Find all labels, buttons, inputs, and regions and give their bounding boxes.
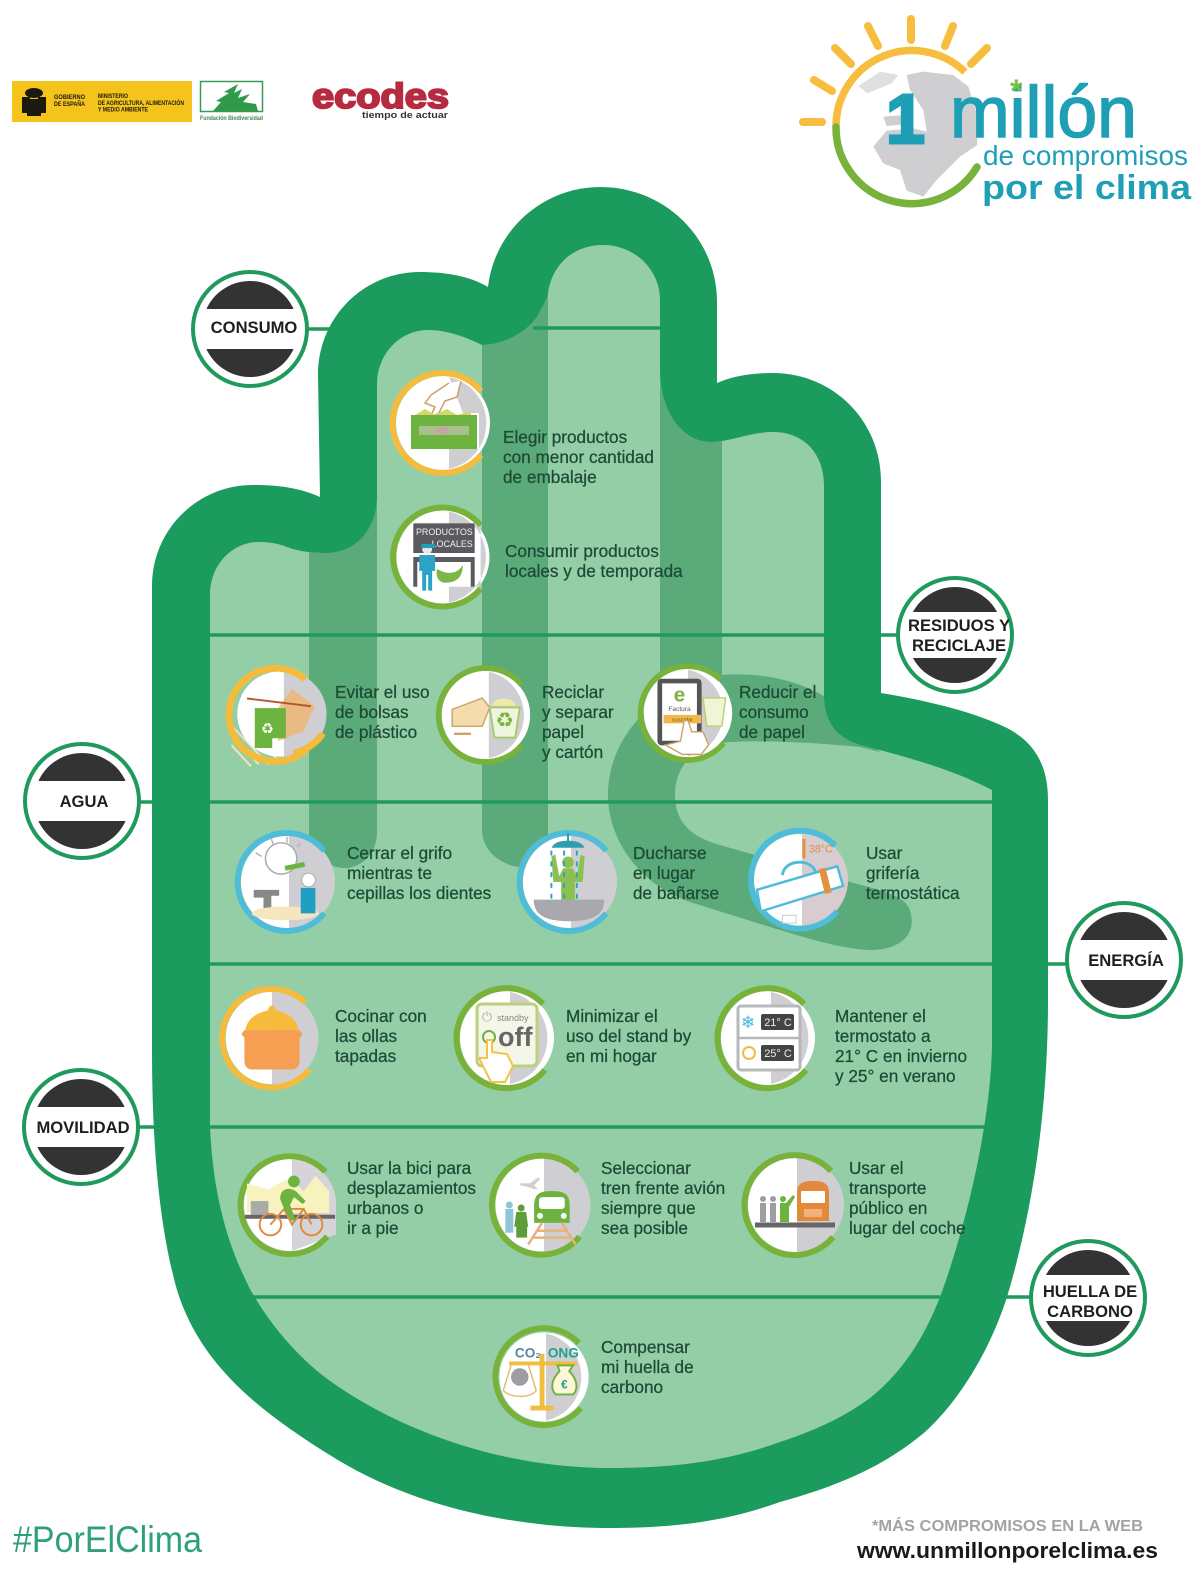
text: consumo xyxy=(739,702,809,722)
item: reciclar papel y cartón xyxy=(439,668,614,762)
icon: train and travellers xyxy=(492,1156,590,1255)
text: ir a pie xyxy=(347,1218,399,1238)
note: más compromisos: *MÁS COMPROMISOS EN LA WEB xyxy=(872,1518,1143,1535)
icon: orange train and platform xyxy=(744,1155,844,1255)
finger shadow bands xyxy=(309,290,912,950)
hand outline xyxy=(152,187,1048,1528)
icon: tablet with e-invoice: e xyxy=(674,684,685,707)
text: Consumir productos xyxy=(505,541,659,561)
item: usar la bici xyxy=(240,1156,476,1254)
text: Minimizar el xyxy=(566,1006,658,1026)
icon: cyclist xyxy=(240,1156,336,1254)
icon: market stall xyxy=(393,508,490,606)
logo: ecodes: ecodes xyxy=(312,77,449,116)
text: y separar xyxy=(542,702,614,722)
badge: consumo: CONSUMO xyxy=(211,318,297,337)
logo: ministerio: DE AGRICULTURA, ALIMENTACIÓN xyxy=(98,99,184,107)
text: Compensar xyxy=(601,1337,690,1357)
text: Usar el xyxy=(849,1158,903,1178)
logo: ministerio: Y MEDIO AMBIENTE xyxy=(98,108,148,114)
badge: residuos y reciclaje: RECICLAJE xyxy=(912,636,1006,655)
text: de papel xyxy=(739,722,805,742)
number 1: 1 xyxy=(886,80,925,158)
text: tren frente avión xyxy=(601,1178,725,1198)
text: carbono xyxy=(601,1377,663,1397)
logo: ministerio: GOBIERNO xyxy=(54,95,85,101)
badge: residuos y reciclaje xyxy=(898,578,1012,692)
badge: huella de carbono xyxy=(1031,1241,1145,1355)
icon: thermostat panel: ❄ xyxy=(741,1013,755,1032)
text: Seleccionar xyxy=(601,1158,691,1178)
icon: crate and hand xyxy=(393,373,490,473)
text: cepillas los dientes xyxy=(347,883,491,903)
item: mantener el termostato xyxy=(717,988,967,1088)
text: Reciclar xyxy=(542,682,604,702)
text: Cerrar el grifo xyxy=(347,843,452,863)
badge: agua xyxy=(25,744,139,858)
hashtag: #PorElClima xyxy=(13,1519,202,1560)
icon: plastic bag xyxy=(229,668,327,766)
icon: standby button: off xyxy=(498,1022,533,1052)
icon: thermostat panel: 21° C xyxy=(764,1017,792,1029)
icon: standby button xyxy=(456,988,554,1088)
logo: ministerio: DE ESPAÑA xyxy=(54,101,86,108)
badge: residuos y reciclaje: RESIDUOS Y xyxy=(908,616,1010,635)
text: grifería xyxy=(866,863,920,883)
icon: thermostatic tap xyxy=(751,831,848,929)
icon: CO2 / ONG scale: CO₂ xyxy=(515,1346,541,1361)
text: lugar del coche xyxy=(849,1218,966,1238)
text: urbanos o xyxy=(347,1198,423,1218)
icon: market stall: PRODUCTOS xyxy=(416,527,473,537)
icon: market stall: LOCALES xyxy=(432,539,473,549)
badge: energía xyxy=(1067,903,1181,1017)
text: termostática xyxy=(866,883,960,903)
text: locales y de temporada xyxy=(505,561,683,581)
tagline: de compromisos xyxy=(983,140,1188,171)
item: elegir productos xyxy=(393,373,654,487)
text: Reducir el xyxy=(739,682,816,702)
item: grifería termostática xyxy=(751,831,960,929)
text: público en xyxy=(849,1198,927,1218)
badge: energía: ENERGÍA xyxy=(1088,951,1164,970)
item: evitar bolsas de plástico xyxy=(229,668,430,766)
icon: standby button: standby xyxy=(497,1013,529,1023)
text: siempre que xyxy=(601,1198,696,1218)
text: uso del stand by xyxy=(566,1026,692,1046)
tagline bold: por el clima xyxy=(982,169,1192,207)
text: Ducharse xyxy=(633,843,707,863)
text: Usar xyxy=(866,843,903,863)
item: cocinar con ollas tapadas xyxy=(222,989,427,1087)
sun ring xyxy=(836,50,977,204)
badge: agua: AGUA xyxy=(60,792,108,811)
logo: ecodes: tiempo de actuar xyxy=(362,110,448,121)
text: 21° C en invierno xyxy=(835,1046,967,1066)
item: ducharse xyxy=(520,833,719,931)
logo: fundación biodiversidad xyxy=(200,82,263,122)
badge: huella de carbono: HUELLA DE xyxy=(1043,1282,1137,1301)
badge: consumo xyxy=(193,272,307,386)
icon: CO2 / ONG scale: € xyxy=(561,1379,568,1392)
text: termostato a xyxy=(835,1026,931,1046)
icon: plastic bag: ♻ xyxy=(261,721,274,737)
text: las ollas xyxy=(335,1026,397,1046)
item: minimizar stand by xyxy=(456,988,692,1088)
logo: ministerio: MINISTERIO xyxy=(98,94,128,100)
text: mientras te xyxy=(347,863,432,883)
text: Evitar el uso xyxy=(335,682,430,702)
text: papel xyxy=(542,722,584,742)
text: sea posible xyxy=(601,1218,688,1238)
icon: shower and bathtub xyxy=(520,833,617,931)
text: transporte xyxy=(849,1178,926,1198)
item: reducir consumo de papel xyxy=(640,666,816,760)
text: de bañarse xyxy=(633,883,719,903)
globe xyxy=(839,54,985,200)
word millón: millón xyxy=(950,73,1137,153)
text: Mantener el xyxy=(835,1006,926,1026)
item: consumir productos locales xyxy=(393,508,683,606)
logo: 1 millón de compromisos por el clima xyxy=(803,19,1192,207)
text: mi huella de xyxy=(601,1357,694,1377)
icon: recycling bin and cardboard xyxy=(439,668,530,762)
text: tapadas xyxy=(335,1046,396,1066)
text: Usar la bici para xyxy=(347,1158,472,1178)
icon: thermostat panel xyxy=(717,988,815,1088)
icon: tablet with e-invoice xyxy=(640,666,732,760)
text: en mi hogar xyxy=(566,1046,657,1066)
icon: tablet with e-invoice: Factura xyxy=(668,706,691,713)
icon: tablet with e-invoice: suscribir xyxy=(672,717,693,723)
icon: CO2 / ONG scale xyxy=(495,1328,589,1425)
icon: thermostatic tap: 38°C xyxy=(809,844,833,856)
connector lines xyxy=(135,329,1070,1297)
text: con menor cantidad xyxy=(503,447,654,467)
icon: CO2 / ONG scale: ONG xyxy=(548,1346,579,1361)
text: de embalaje xyxy=(503,467,597,487)
badge: movilidad xyxy=(24,1070,138,1184)
icon: pot xyxy=(222,989,318,1087)
icon: tap and tooth brushing xyxy=(238,833,335,931)
section dividers xyxy=(210,328,992,1297)
item: usar transporte público xyxy=(744,1155,966,1255)
item: cerrar el grifo xyxy=(238,833,491,931)
text: y cartón xyxy=(542,742,603,762)
item: seleccionar tren xyxy=(492,1156,725,1255)
text: Cocinar con xyxy=(335,1006,427,1026)
logo: ministerio xyxy=(12,81,192,122)
text: y 25° en verano xyxy=(835,1066,956,1086)
icon: thermostat panel: 25° C xyxy=(764,1048,792,1060)
text: Elegir productos xyxy=(503,427,627,447)
badge: movilidad: MOVILIDAD xyxy=(36,1118,130,1137)
text: de plástico xyxy=(335,722,417,742)
icon: recycling bin and cardboard: ♻ xyxy=(496,709,514,732)
hand interior xyxy=(210,245,992,1468)
sun rays xyxy=(803,19,987,122)
logo: fundación biodiversidad: Fundación Biodiversidad xyxy=(200,116,263,122)
text: desplazamientos xyxy=(347,1178,476,1198)
text: de bolsas xyxy=(335,702,409,722)
item: compensar huella de carbono xyxy=(495,1328,694,1425)
text: en lugar xyxy=(633,863,695,883)
badge: huella de carbono: CARBONO xyxy=(1047,1302,1133,1321)
website url: www.unmillonporelclima.es xyxy=(856,1538,1158,1563)
icon: standby button: ⏻ xyxy=(482,1009,492,1024)
green asterisk: * xyxy=(1010,73,1023,109)
